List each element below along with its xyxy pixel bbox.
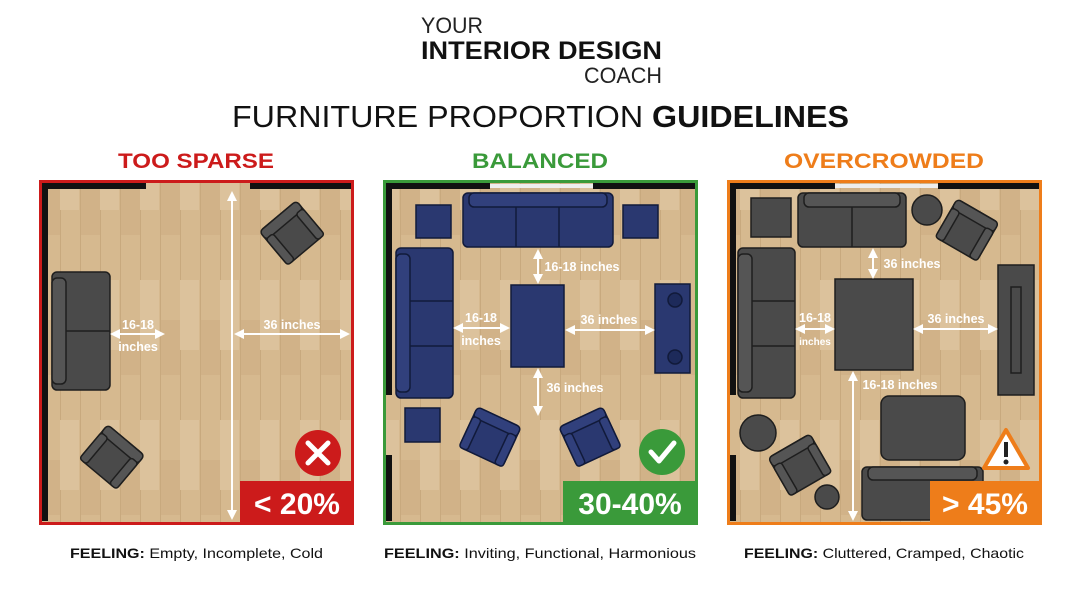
- heading: balanced: BALANCED: [472, 150, 608, 173]
- icon: warning: [984, 430, 1028, 468]
- arrows and labels: [112, 193, 348, 518]
- arrows and labels: 36 inches: [928, 312, 985, 326]
- furniture navy: [396, 193, 690, 442]
- arrows and labels: 16-18: [799, 311, 831, 325]
- arrows and labels: inches: [799, 337, 831, 348]
- panel: balanced: [384, 182, 698, 525]
- arrows and labels: [797, 250, 996, 519]
- heading: overcrowded: OVERCROWDED: [784, 150, 984, 173]
- badge: 30-40%: [563, 481, 698, 525]
- arrows and labels: [455, 251, 653, 414]
- arrows and labels: 36 inches: [581, 313, 638, 327]
- furniture grey: [738, 193, 1034, 520]
- arrows and labels: 16-18: [465, 311, 497, 325]
- panel: too sparse: [40, 182, 354, 525]
- feeling: balanced: FEELING: Inviting, Functional, Harmonious: [384, 545, 696, 561]
- heading: too sparse: TOO SPARSE: [118, 150, 274, 173]
- arrows and labels: 16-18: [122, 318, 154, 332]
- feeling: overcrowded: FEELING: Cluttered, Cramped, Chaotic: [744, 545, 1024, 561]
- badge: <20%: [240, 481, 354, 525]
- arrows and labels: 36 inches: [884, 257, 941, 271]
- arrows and labels: 16-18 inches: [544, 260, 620, 274]
- brand logo: [421, 13, 662, 88]
- brand logo: INTERIOR DESIGN: [421, 37, 662, 65]
- arrows and labels: inches: [461, 334, 501, 348]
- icon: red x: [295, 430, 341, 476]
- badge: <20%: < 20%: [254, 488, 340, 521]
- arrows and labels: inches: [118, 340, 158, 354]
- badge: 30-40%: 30-40%: [578, 488, 682, 521]
- arrows and labels: 16-18 inches: [862, 378, 938, 392]
- brand logo: COACH: [584, 63, 662, 88]
- badge: >45%: [930, 481, 1042, 525]
- feeling: sparse: FEELING: Empty, Incomplete, Cold: [70, 545, 323, 561]
- arrows and labels: 36 inches: [264, 318, 321, 332]
- brand logo: YOUR: [421, 13, 483, 38]
- armchairs: [79, 201, 325, 489]
- sofa: [52, 272, 110, 390]
- title: FURNITURE PROPORTION GUIDELINES: [232, 99, 849, 134]
- panel: overcrowded: [728, 182, 1042, 525]
- arrows and labels: 36 inches: [547, 381, 604, 395]
- badge: >45%: > 45%: [942, 488, 1028, 521]
- icon: check: [639, 429, 685, 475]
